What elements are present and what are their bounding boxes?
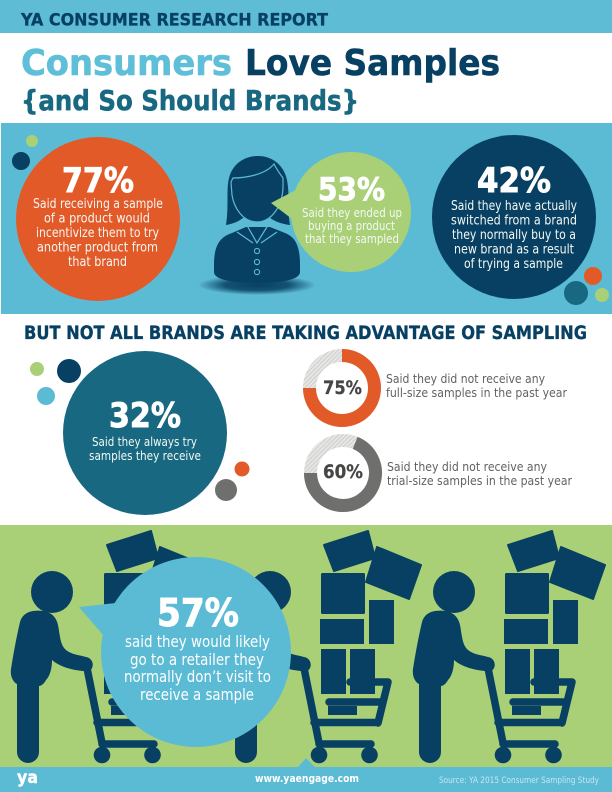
speech bubble: 57%: 57% xyxy=(157,591,239,635)
stat circle: 77%: incentivize them to try xyxy=(36,226,159,241)
speech bubble: 53% xyxy=(271,152,411,272)
speech bubble: 53%: that they sampled xyxy=(305,231,399,246)
donut chart: 60% xyxy=(310,440,376,506)
stat circle: 32% xyxy=(63,351,227,515)
speech bubble: 57%: receive a sample xyxy=(140,685,254,704)
shopper with cart 1 xyxy=(11,531,204,763)
decorative dots: lower right xyxy=(564,267,609,305)
stat circle: 42%: they normally buy to a xyxy=(452,228,576,243)
speech bubble: 57%: normally don’t visit to xyxy=(124,667,271,686)
title: Love Samples xyxy=(245,43,500,84)
header band: YA CONSUMER RESEARCH REPORT xyxy=(20,10,329,30)
decorative dots: around 32% upper xyxy=(30,359,81,405)
stat circle: 77%: another product from xyxy=(37,240,158,256)
stat circle: 42%: Said they have actually xyxy=(451,199,577,214)
stat circle: 42% xyxy=(432,135,596,299)
logo: ya: ya xyxy=(17,768,38,788)
stat circle: 32%: samples they receive xyxy=(89,448,201,463)
text: trial-size samples: trial-size samples in the past year xyxy=(387,473,573,488)
stat circle: 77%: Said receiving a sample xyxy=(33,197,163,212)
text: full-size samples: Said they did not receive any xyxy=(386,371,545,386)
speech bubble: 57%: go to a retailer they xyxy=(130,650,264,669)
decorative dots: around 32% lower xyxy=(215,462,250,501)
stat circle: 42%: of trying a sample xyxy=(464,257,563,272)
stat circle: 42%: switched from a brand xyxy=(451,214,577,228)
stat circle: 32%: 32% xyxy=(109,396,181,436)
donut chart: 75%: 75% xyxy=(323,377,362,399)
stat circle: 77%: that brand xyxy=(68,255,127,270)
donut chart: 60%: 60% xyxy=(323,461,363,483)
stat circle: 77% xyxy=(16,137,180,301)
shopper with cart 3 xyxy=(413,531,605,763)
panel: consumer stats xyxy=(1,123,612,314)
shopper with cart 2 xyxy=(229,531,421,763)
icon: woman with headset xyxy=(198,156,316,295)
footer band xyxy=(0,758,612,792)
stat circle: 77%: of a product would xyxy=(44,212,150,226)
panel: shoppers xyxy=(0,525,612,768)
header band xyxy=(0,0,612,33)
subtitle: {and So Should Brands} xyxy=(21,85,359,117)
donut chart: 75% xyxy=(310,356,374,420)
speech bubble: 53%: buying a product xyxy=(308,218,395,233)
title xyxy=(21,43,500,84)
speech bubble: 57%: said they would likely xyxy=(125,632,270,651)
stat circle: 77%: 77% xyxy=(62,161,134,201)
stat circle: 42%: 42% xyxy=(477,161,551,201)
speech bubble: 57% xyxy=(79,557,291,747)
text: trial-size samples: Said they did not receive any xyxy=(387,459,547,474)
speech bubble: 53%: 53% xyxy=(318,172,385,208)
stat circle: 32%: Said they always try xyxy=(92,434,197,449)
text: full-size samples xyxy=(386,371,568,400)
title: Consumers xyxy=(21,43,232,84)
text: trial-size samples xyxy=(387,459,573,488)
speech bubble: 53%: Said they ended up xyxy=(302,205,402,220)
website url: www.yaengage.com xyxy=(255,773,359,785)
stat circle: 42%: new brand as a result xyxy=(454,242,574,258)
text: full-size samples: full-size samples in the past year xyxy=(386,385,568,400)
decorative dots: upper left xyxy=(12,135,38,170)
